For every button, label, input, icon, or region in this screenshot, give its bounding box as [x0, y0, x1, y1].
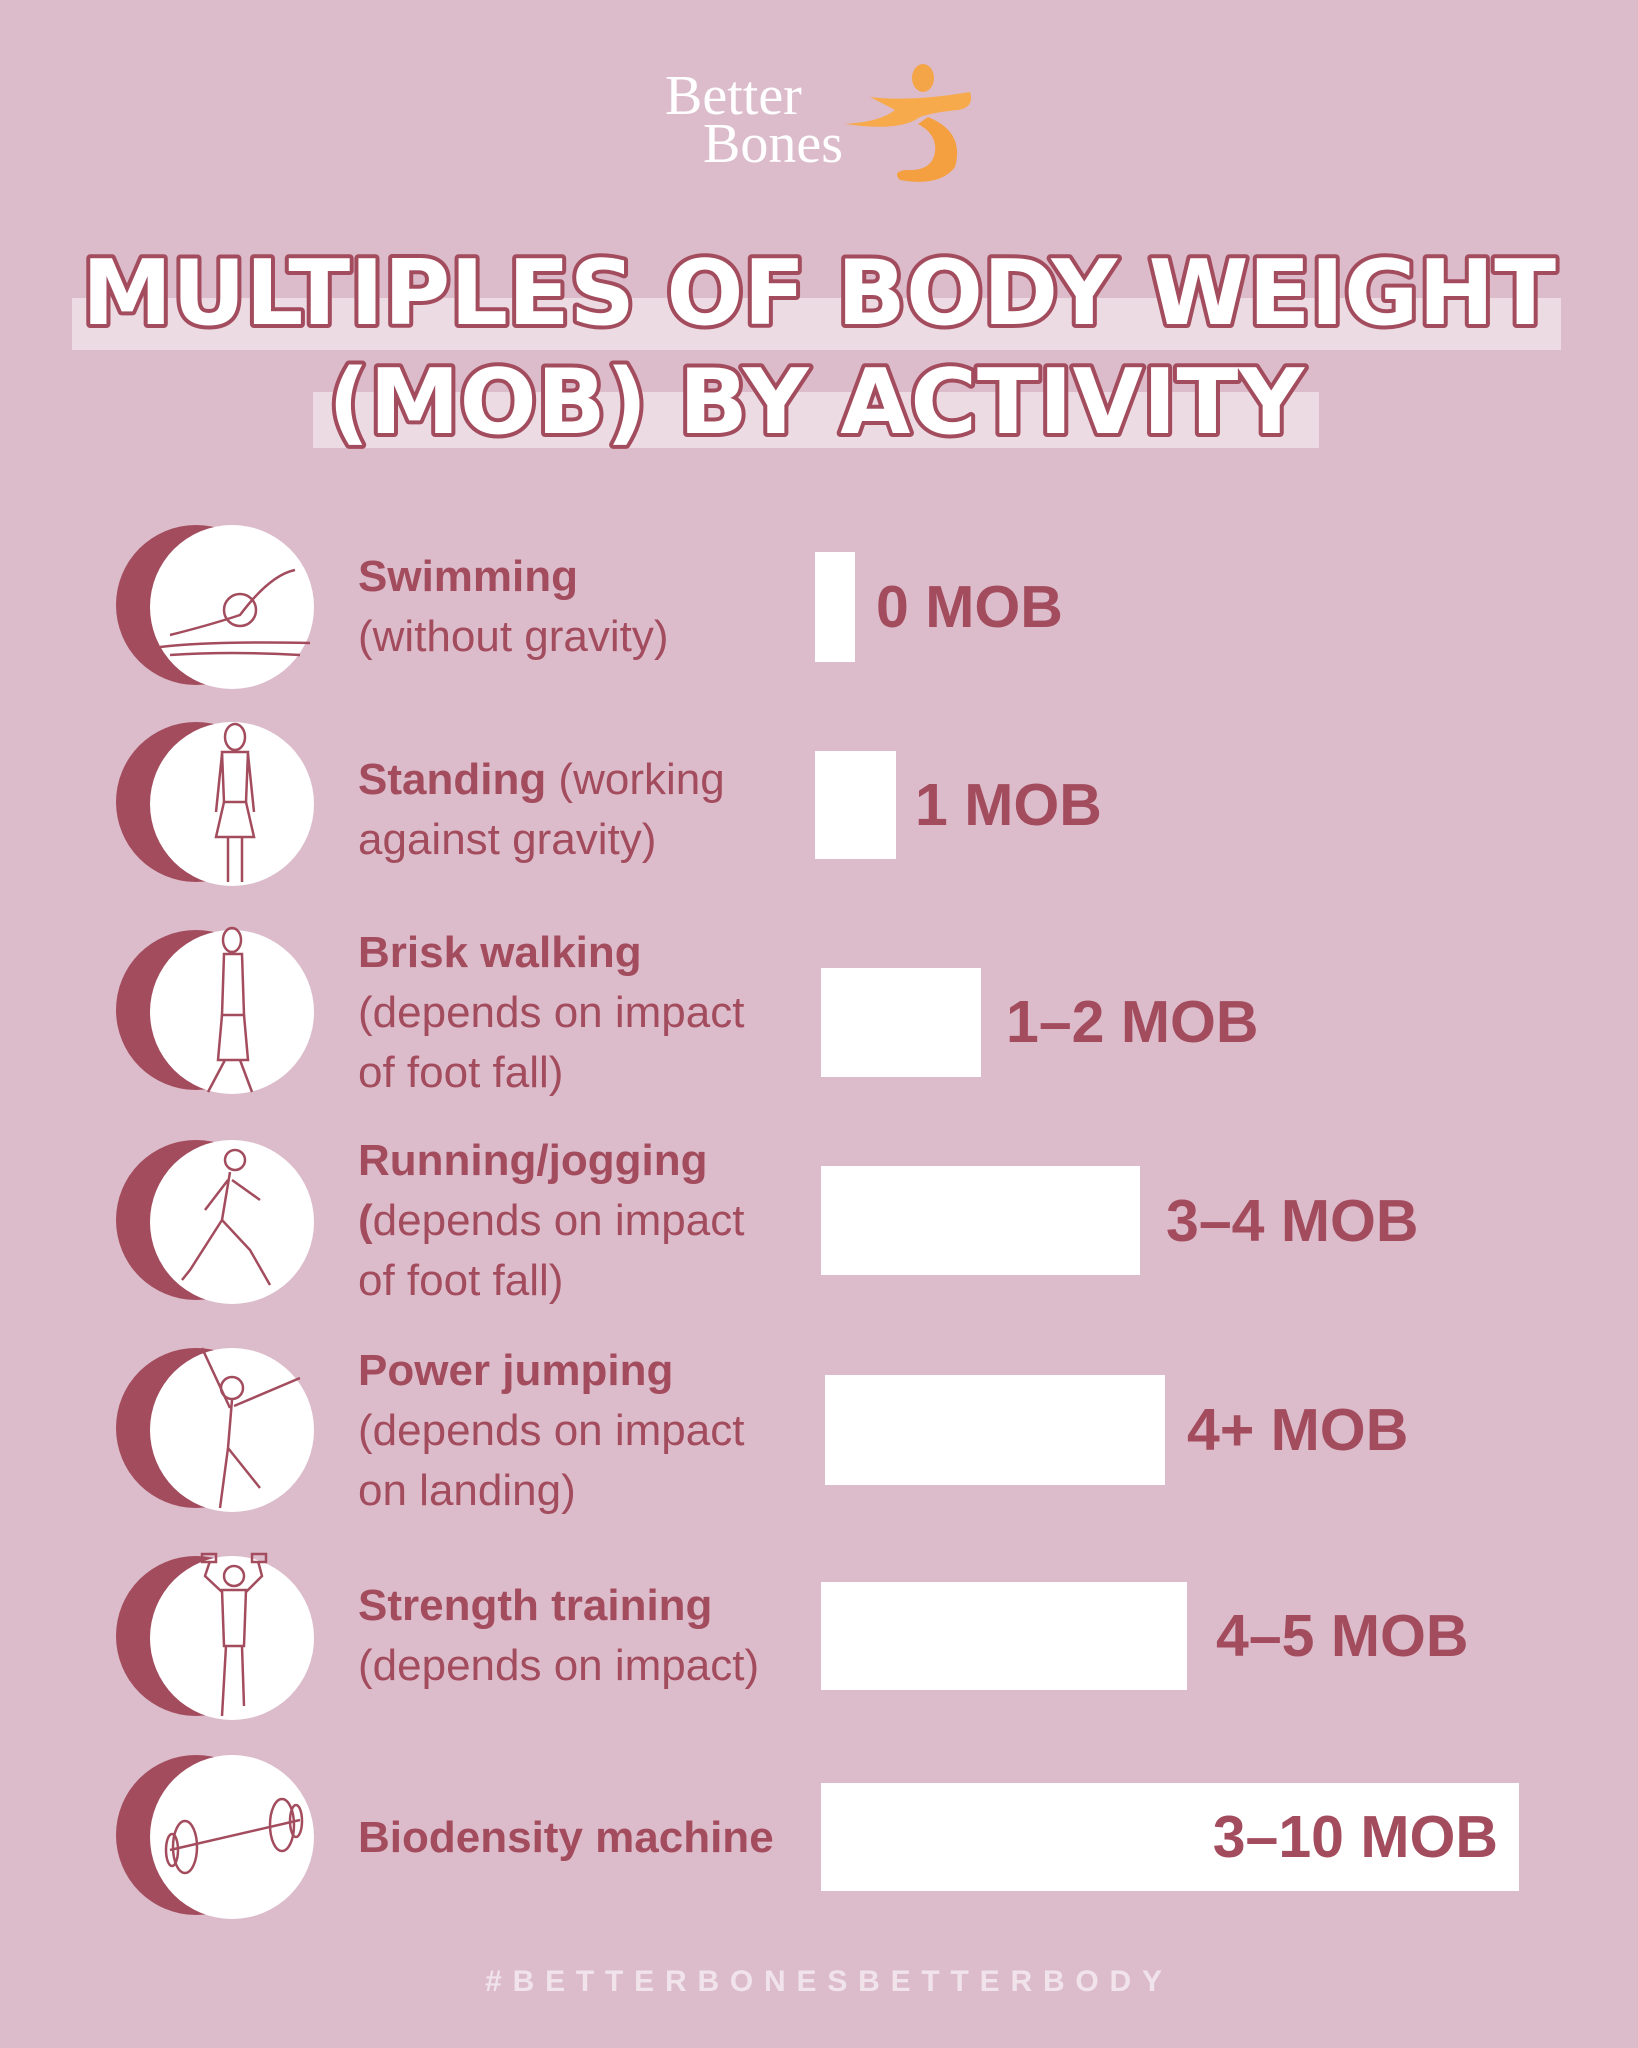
label: 0 MOB: 0 MOB: [876, 574, 1063, 640]
text: brisk walking: [358, 928, 744, 1097]
text: power jumping: on landing): [358, 1466, 576, 1515]
row: standing: [116, 722, 1102, 886]
text: power jumping: Power jumping: [358, 1346, 673, 1395]
icon: runner: [116, 1140, 314, 1304]
icon: walking woman: [116, 926, 314, 1094]
text: brisk walking: of foot fall): [358, 1048, 563, 1097]
text: standing: [358, 755, 725, 864]
logo: [665, 64, 972, 182]
row: strength training: [116, 1552, 1468, 1720]
title: (MOB) BY ACTIVITY: [328, 350, 1306, 455]
text: brisk walking: Brisk walking: [358, 928, 642, 977]
text: swimming: [358, 552, 669, 661]
label: 1-2 MOB: 1–2 MOB: [1006, 989, 1258, 1055]
bar: 3-4 MOB: [821, 1166, 1140, 1275]
hashtag footer: #BETTERBONESBETTERBODY: [485, 1965, 1173, 1998]
label: 1 MOB: 1 MOB: [915, 772, 1102, 838]
label: 4+ MOB: 4+ MOB: [1187, 1397, 1408, 1463]
label: 3-4 MOB: 3–4 MOB: [1166, 1188, 1418, 1254]
text: strength training: [358, 1581, 759, 1690]
text: standing: against gravity): [358, 815, 656, 864]
row: swimming: [116, 525, 1063, 689]
icon: jumper: [116, 1348, 314, 1512]
icon: dumbbell woman: [116, 1552, 314, 1720]
row: biodensity: [116, 1755, 1519, 1919]
text: running: [358, 1136, 744, 1305]
text: biodensity: Biodensity machine: [358, 1813, 774, 1862]
bar: 4+ MOB: [825, 1375, 1165, 1485]
logo text: [665, 65, 843, 175]
text: swimming: Swimming: [358, 552, 578, 601]
icon: barbell: [116, 1755, 314, 1919]
bar: 0 MOB: [815, 552, 855, 662]
icon: standing woman: [116, 722, 314, 886]
text: power jumping: (depends on impact: [358, 1406, 744, 1455]
label: 3-10 MOB: 3–10 MOB: [1213, 1804, 1498, 1870]
text: standing: Standing (working: [358, 755, 725, 804]
text: running: of foot fall): [358, 1256, 563, 1305]
text: strength training: (depends on impact): [358, 1641, 759, 1690]
title: MULTIPLES OF BODY WEIGHT: [82, 241, 1556, 346]
bar: 1 MOB: [815, 751, 896, 859]
title highlight bands: [72, 298, 1561, 350]
text: swimming: (without gravity): [358, 612, 669, 661]
text: running: (depends on impact: [358, 1196, 744, 1245]
row: brisk walking: [116, 926, 1258, 1097]
icon: swimmer: [116, 525, 314, 689]
row: power jumping: [116, 1346, 1408, 1515]
text: power jumping: [358, 1346, 744, 1515]
title: [72, 241, 1561, 455]
row: running: [116, 1136, 1418, 1305]
text: brisk walking: (depends on impact: [358, 988, 744, 1037]
text: running: Running/jogging: [358, 1136, 707, 1185]
logo text: Better: [665, 65, 802, 127]
label: 4-5 MOB: 4–5 MOB: [1216, 1603, 1468, 1669]
logo text: Bones: [703, 113, 843, 175]
bar: 4-5 MOB: [821, 1582, 1187, 1690]
text: strength training: Strength training: [358, 1581, 712, 1630]
bar: 3-10 MOB: [821, 1783, 1519, 1891]
logo figure: [846, 64, 972, 182]
bar: 1-2 MOB: [821, 968, 981, 1077]
